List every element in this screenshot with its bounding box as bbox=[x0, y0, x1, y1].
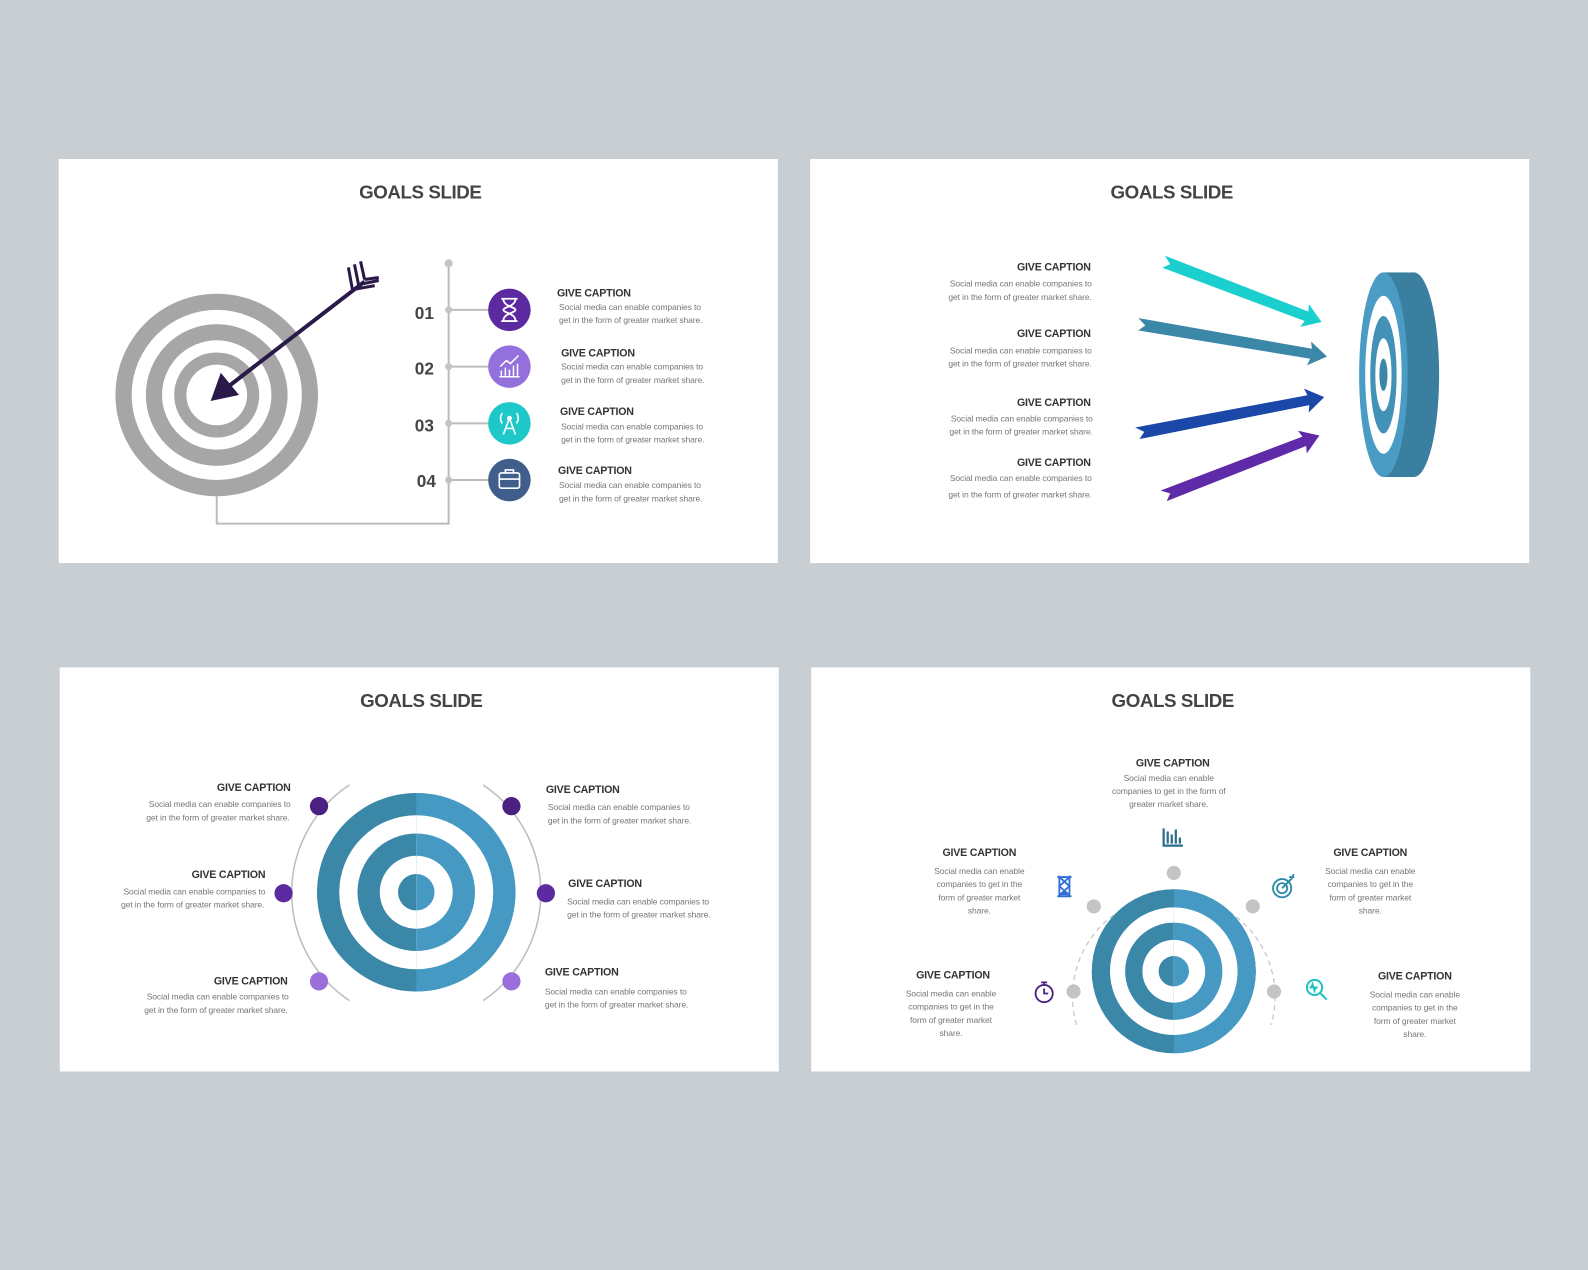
captions slide 3: GIVE CAPTION bbox=[192, 869, 265, 881]
captions slide 3: GIVE CAPTION bbox=[546, 784, 620, 796]
captions slide 4: Social media can enable bbox=[934, 866, 1025, 876]
captions slide 1: get in the form of greater market share. bbox=[561, 375, 704, 385]
captions slide 3: Social media can enable companies to bbox=[545, 987, 687, 997]
captions slide 3: GIVE CAPTION bbox=[217, 782, 291, 794]
captions slide 1: GIVE CAPTION bbox=[560, 406, 634, 418]
captions slide 4: share. bbox=[1359, 906, 1382, 916]
captions slide 4: form of greater market bbox=[1329, 892, 1412, 902]
icon: chart bbox=[488, 345, 531, 388]
icon: hourglass bbox=[488, 289, 531, 331]
captions slide 1: Social media can enable companies to bbox=[561, 421, 703, 431]
captions slide 1 bbox=[557, 288, 704, 503]
captions slide 4: companies to get in the bbox=[1372, 1003, 1458, 1013]
title 1: GOALS SLIDE bbox=[359, 182, 482, 203]
captions slide 2: Social media can enable companies to bbox=[950, 345, 1092, 355]
title 3: GOALS SLIDE bbox=[360, 690, 483, 711]
captions slide 3: get in the form of greater market share. bbox=[144, 1005, 288, 1015]
captions slide 4: GIVE CAPTION bbox=[942, 847, 1016, 859]
dashed arc bbox=[1073, 895, 1275, 1025]
captions slide 4: companies to get in the bbox=[1327, 879, 1413, 889]
icon: target teal bbox=[1273, 874, 1293, 897]
icon: bar chart bbox=[1164, 828, 1183, 846]
timeline connector bbox=[217, 263, 489, 524]
captions slide 3: get in the form of greater market share. bbox=[146, 812, 290, 822]
title 2: GOALS SLIDE bbox=[1111, 182, 1233, 203]
captions slide 2: Social media can enable companies to bbox=[950, 473, 1092, 483]
captions slide 2: get in the form of greater market share. bbox=[948, 489, 1092, 499]
captions slide 3: get in the form of greater market share. bbox=[567, 910, 711, 920]
captions slide 2: Social media can enable companies to bbox=[951, 413, 1093, 423]
panel: slide 4 semicircle bbox=[811, 667, 1530, 1071]
target blue 2 bbox=[1092, 889, 1256, 1053]
captions slide 2: GIVE CAPTION bbox=[1017, 328, 1091, 340]
target blue bbox=[317, 793, 515, 991]
captions slide 4: Social media can enable bbox=[906, 989, 996, 999]
captions slide 4: companies to get in the form of bbox=[1112, 786, 1226, 796]
captions slide 1: Social media can enable companies to bbox=[559, 480, 701, 490]
captions slide 3: GIVE CAPTION bbox=[214, 975, 288, 987]
icon: antenna bbox=[488, 402, 531, 445]
captions slide 3: get in the form of greater market share. bbox=[545, 1000, 688, 1010]
captions slide 4: form of greater market bbox=[910, 1015, 993, 1025]
captions slide 2: GIVE CAPTION bbox=[1017, 261, 1091, 273]
captions slide 4: Social media can enable bbox=[1370, 990, 1460, 1000]
captions slide 4: GIVE CAPTION bbox=[1333, 847, 1407, 859]
captions slide 2: get in the form of greater market share. bbox=[948, 359, 1092, 369]
captions slide 2: GIVE CAPTION bbox=[1017, 397, 1091, 409]
icon: stopwatch bbox=[1036, 982, 1053, 1002]
captions slide 1: get in the form of greater market share. bbox=[561, 435, 704, 445]
captions slide 3 bbox=[121, 782, 711, 1015]
captions slide 2 bbox=[948, 261, 1093, 499]
panel: slide 1 timeline bbox=[59, 159, 778, 563]
captions slide 3: Social media can enable companies to bbox=[149, 799, 291, 809]
arrow into target bbox=[211, 261, 379, 401]
captions slide 4: companies to get in the bbox=[908, 1002, 994, 1012]
captions slide 3: Social media can enable companies to bbox=[147, 992, 289, 1002]
captions slide 1: Social media can enable companies to bbox=[561, 362, 703, 372]
captions slide 2: get in the form of greater market share. bbox=[948, 292, 1092, 302]
captions slide 1: Social media can enable companies to bbox=[559, 302, 701, 312]
captions slide 2: GIVE CAPTION bbox=[1017, 457, 1091, 469]
icon: briefcase bbox=[488, 459, 531, 501]
dots bbox=[274, 797, 555, 990]
captions slide 1: get in the form of greater market share. bbox=[559, 315, 702, 325]
icon: hourglass blue bbox=[1057, 877, 1071, 896]
numbers: 01 bbox=[415, 303, 434, 323]
captions slide 3: GIVE CAPTION bbox=[568, 878, 642, 890]
captions slide 4: share. bbox=[939, 1028, 962, 1038]
numbers: 04 bbox=[417, 471, 436, 491]
captions slide 4: greater market share. bbox=[1129, 799, 1208, 809]
target grey bbox=[115, 294, 318, 496]
arrows bbox=[1134, 250, 1329, 508]
captions slide 1: GIVE CAPTION bbox=[558, 465, 632, 477]
captions slide 2: Social media can enable companies to bbox=[950, 279, 1092, 289]
numbers: 03 bbox=[415, 415, 434, 435]
panel: slide 3 ring bbox=[60, 667, 779, 1071]
captions slide 4: form of greater market bbox=[1374, 1016, 1456, 1026]
captions slide 4: Social media can enable bbox=[1325, 866, 1416, 876]
numbers bbox=[415, 303, 436, 491]
captions slide 3: get in the form of greater market share. bbox=[548, 815, 691, 825]
captions slide 4: share. bbox=[1403, 1029, 1426, 1039]
captions slide 3: GIVE CAPTION bbox=[545, 966, 619, 978]
captions slide 3: Social media can enable companies to bbox=[567, 896, 709, 906]
icon: magnifier bbox=[1307, 980, 1327, 1000]
arcs bbox=[292, 785, 541, 1001]
captions slide 3: get in the form of greater market share. bbox=[121, 899, 264, 909]
captions slide 1: GIVE CAPTION bbox=[557, 288, 631, 300]
captions slide 1: get in the form of greater market share. bbox=[559, 493, 702, 503]
captions slide 4: GIVE CAPTION bbox=[916, 969, 990, 981]
captions slide 3: Social media can enable companies to bbox=[548, 802, 690, 812]
captions slide 4 bbox=[906, 758, 1460, 1039]
captions slide 4: Social media can enable bbox=[1124, 773, 1214, 783]
captions slide 2: get in the form of greater market share. bbox=[949, 426, 1093, 436]
numbers: 02 bbox=[415, 359, 434, 379]
captions slide 4: GIVE CAPTION bbox=[1378, 970, 1452, 982]
captions slide 4: GIVE CAPTION bbox=[1136, 758, 1210, 770]
captions slide 4: companies to get in the bbox=[937, 879, 1022, 889]
3D target bbox=[1359, 272, 1439, 477]
captions slide 4: form of greater market bbox=[938, 892, 1021, 902]
grey dots bbox=[1066, 866, 1281, 999]
captions slide 3: Social media can enable companies to bbox=[123, 886, 266, 896]
panel: slide 2 arrows bbox=[810, 159, 1529, 563]
captions slide 1: GIVE CAPTION bbox=[561, 347, 635, 359]
title 4: GOALS SLIDE bbox=[1112, 690, 1234, 711]
captions slide 4: share. bbox=[968, 906, 991, 916]
